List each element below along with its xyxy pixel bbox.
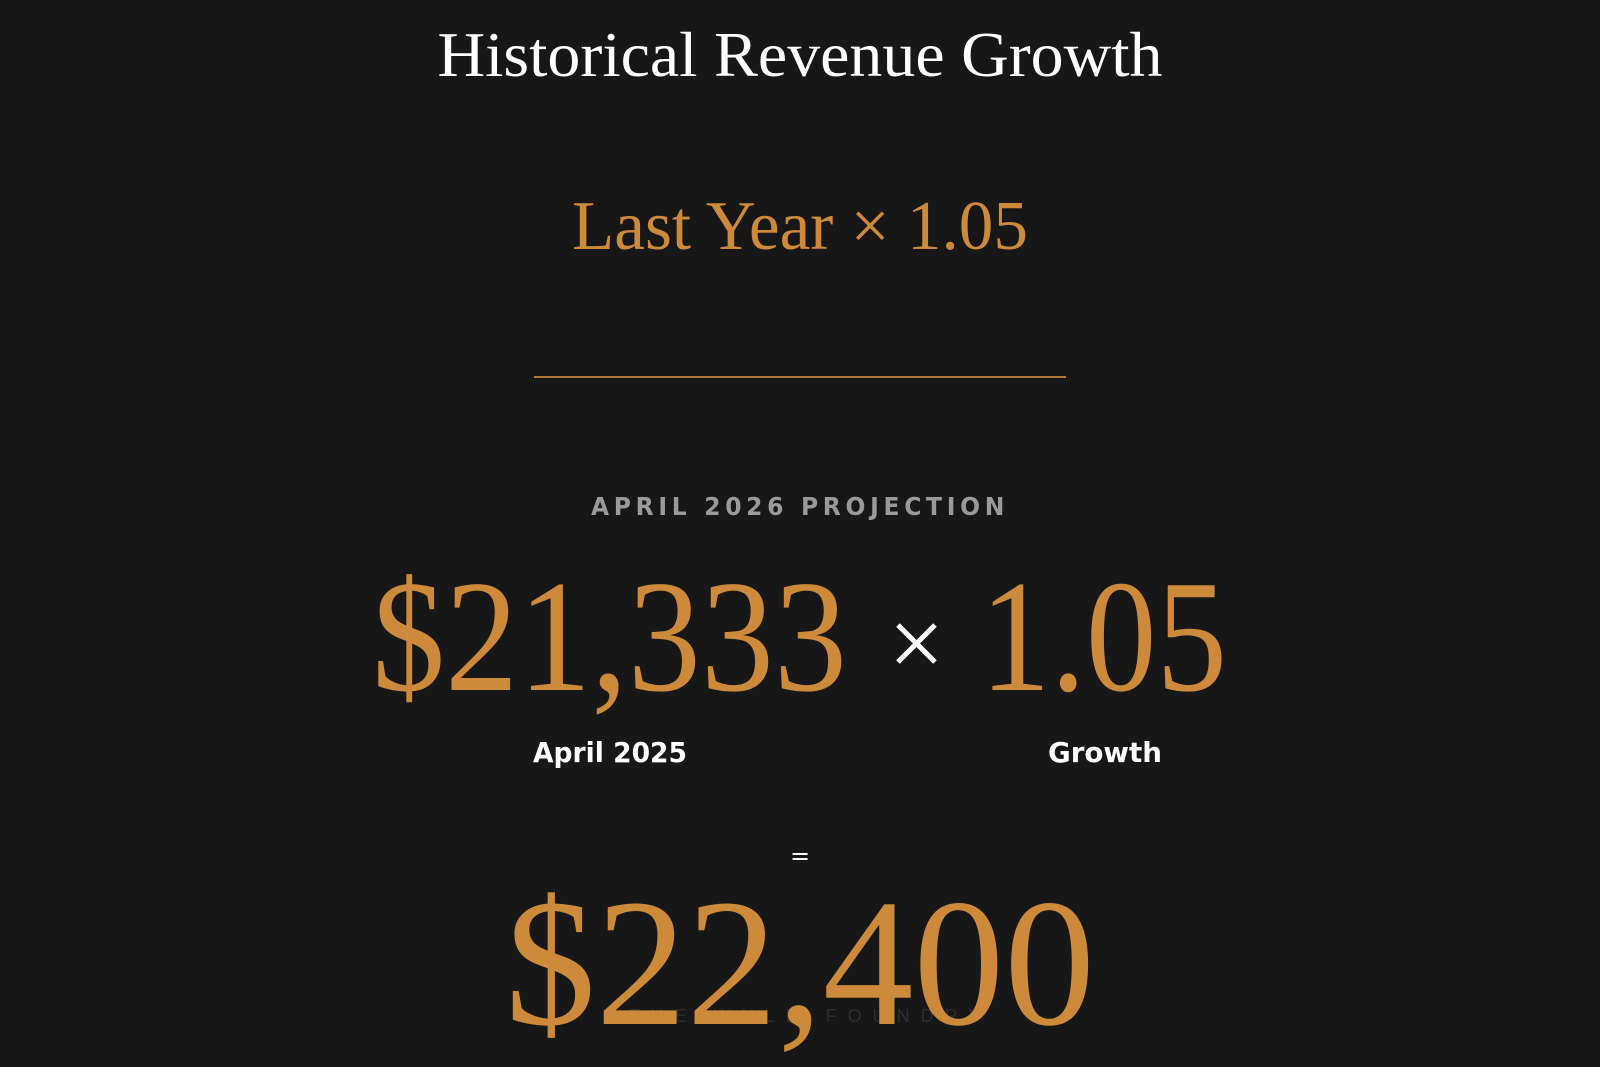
equation: last year value: $21,333 (372, 547, 847, 725)
section label: APRIL 2026 PROJECTION (591, 492, 1009, 521)
title: Historical Revenue Growth (438, 19, 1162, 90)
equation: growth factor: 1.05 (980, 547, 1227, 725)
equals sign: = (790, 842, 810, 870)
label: Growth: Growth (1048, 736, 1162, 769)
multiply sign (898, 625, 935, 662)
formula subtitle: Last Year × 1.05 (572, 188, 1028, 265)
result: $22,400 (505, 863, 1095, 1064)
divider line (534, 376, 1066, 378)
label: April 2025: April 2025 (533, 736, 687, 769)
watermark: THE WYLD FOUNDRY (629, 1006, 991, 1026)
